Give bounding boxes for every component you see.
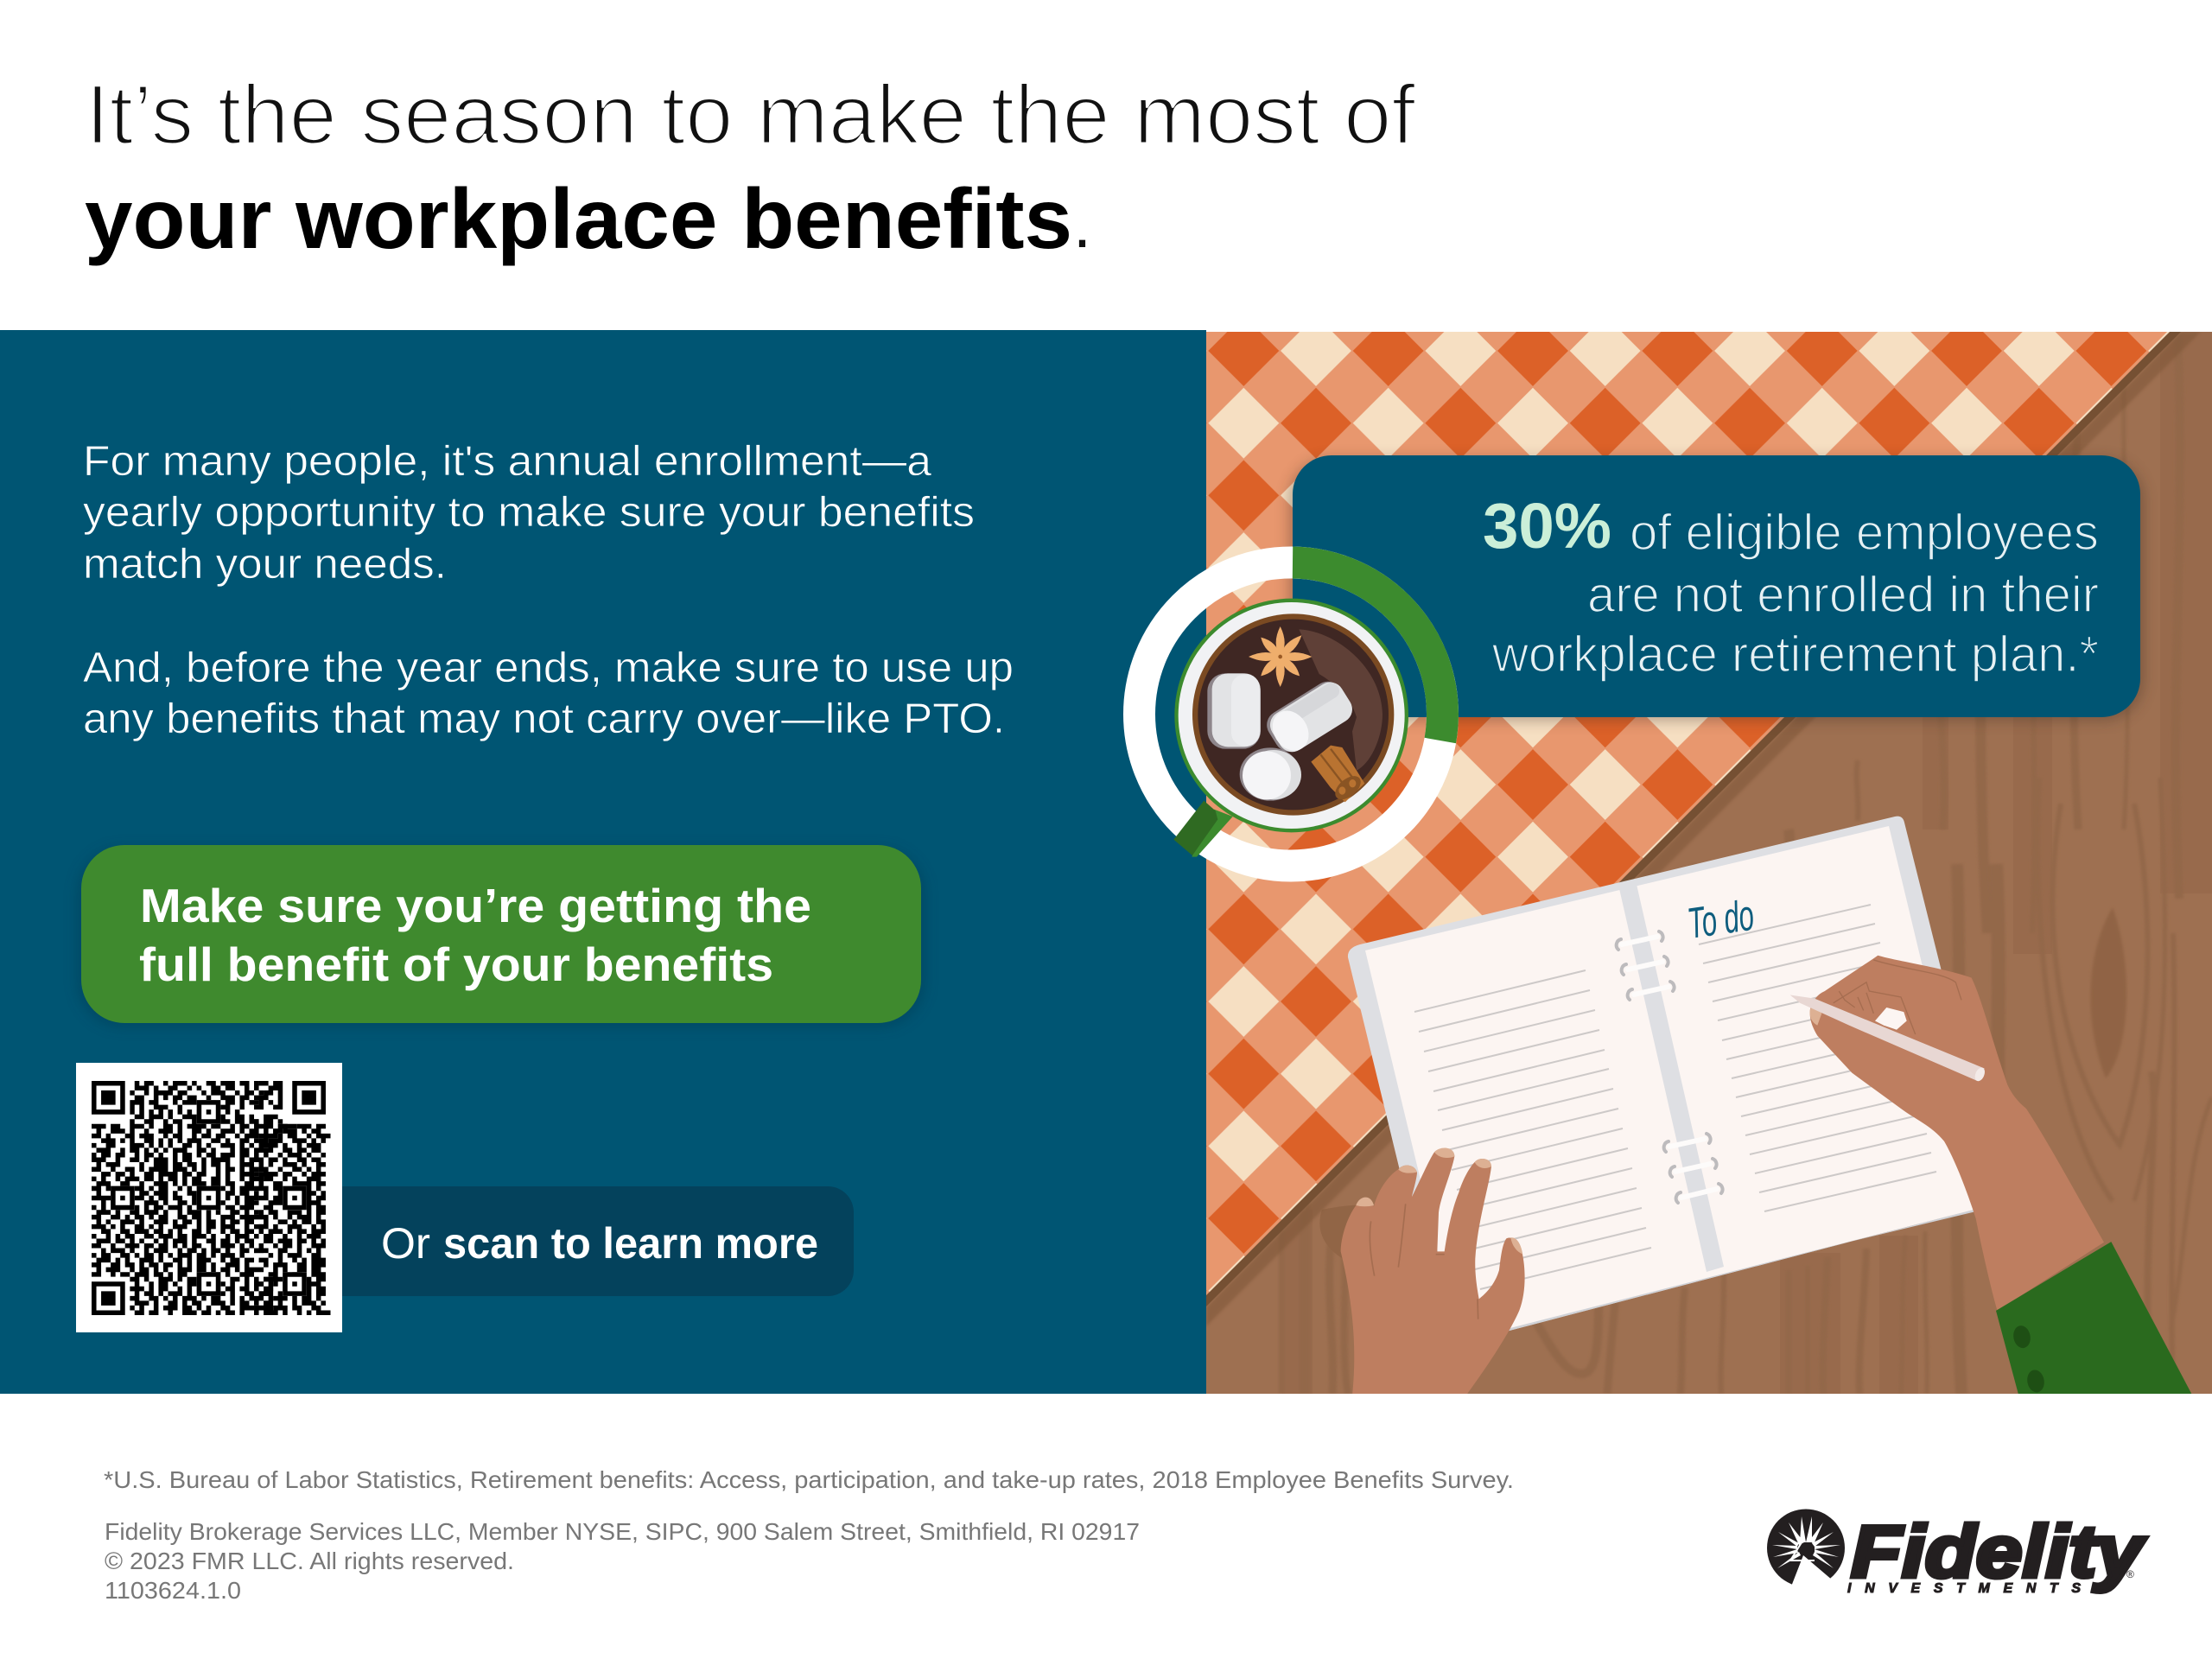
- title: It’s the season to make the most of: [86, 67, 1416, 162]
- callout panel: 30 percent statistic: workplace retirement plan.*: [1491, 626, 2099, 683]
- illustration: table scene: [1206, 332, 2212, 1439]
- callout panel: 30 percent statistic: are not enrolled in their: [1587, 567, 2099, 623]
- title: .: [1071, 172, 1094, 266]
- text block: enrollment intro: And, before the year ends, make sure to use up: [83, 645, 1014, 691]
- callout: scan to learn more: scan to learn more: [443, 1219, 818, 1268]
- wood table background: [1206, 332, 2212, 1394]
- logo: Fidelity Investments: ®: [2126, 1568, 2134, 1580]
- title: [85, 67, 1416, 266]
- binder rings: [1617, 931, 1723, 1203]
- right hand with pen: [1790, 956, 2104, 1311]
- icon: hot chocolate mug: [1173, 599, 1408, 857]
- legal disclosure text: Fidelity Brokerage Services LLC, Member NYSE, SIPC, 900 Salem Street, Smithfield, RI 02917: [105, 1518, 1140, 1545]
- QR code: [76, 1063, 342, 1332]
- button: full benefit call to action: [78, 845, 925, 1027]
- panel: teal message panel: [0, 330, 1206, 1394]
- marshmallow: upright: [1207, 673, 1261, 749]
- handwritten to do: To do: [1685, 890, 1757, 948]
- button: full benefit call to action: full benefit of your benefits: [139, 938, 773, 991]
- callout: scan to learn more: [337, 1186, 854, 1296]
- legal disclosure text: [105, 1518, 1140, 1604]
- text block: enrollment intro: For many people, it's annual enrollment—a: [83, 438, 932, 485]
- marshmallow: tilted: [1262, 676, 1357, 759]
- callout panel: 30 percent statistic: of eligible employees: [1630, 505, 2099, 561]
- callout panel: 30 percent statistic: 30%: [1483, 490, 1611, 562]
- cinnamon stick: [1311, 746, 1365, 804]
- text block: enrollment intro: any benefits that may not carry over—like PTO.: [83, 696, 1005, 742]
- icon: pyramid sunburst: [1767, 1509, 1845, 1590]
- title: your workplace benefits: [85, 171, 1072, 266]
- logo: Fidelity Investments: INVESTMENTS: [1847, 1581, 2081, 1596]
- text block: enrollment intro: yearly opportunity to make sure your benefits: [83, 489, 975, 536]
- left page ruled lines: [1414, 970, 1651, 1289]
- text block: enrollment intro: [83, 438, 1014, 742]
- right page ruled lines: [1699, 905, 1936, 1211]
- legal disclosure text: © 2023 FMR LLC. All rights reserved.: [105, 1548, 514, 1574]
- logo: Fidelity Investments: [1767, 1509, 2146, 1596]
- star anise: [1249, 626, 1312, 687]
- logo: Fidelity Investments: Fidelity: [1851, 1511, 2146, 1593]
- left hand: [1341, 1148, 1525, 1395]
- callout: scan to learn more: Or: [381, 1219, 430, 1268]
- callout panel: 30 percent statistic: [1289, 455, 2144, 721]
- green sleeve with buttons: [1996, 1242, 2191, 1394]
- notebook: [1348, 817, 1999, 1348]
- mug handle: [1173, 801, 1233, 857]
- gingham tablecloth: [1206, 332, 2201, 1326]
- footnote source: *U.S. Bureau of Labor Statistics, Retirement benefits: Access, participation, and take-up rates, 2018 Employee Benefits Survey.: [104, 1466, 1514, 1493]
- donut chart: 30 percent ring: [1139, 563, 1443, 866]
- button: full benefit call to action: Make sure you’re getting the: [140, 879, 811, 932]
- text block: enrollment intro: match your needs.: [83, 541, 447, 588]
- spine: [1618, 880, 1724, 1272]
- legal disclosure text: 1103624.1.0: [105, 1577, 241, 1604]
- marshmallow: round: [1240, 747, 1301, 801]
